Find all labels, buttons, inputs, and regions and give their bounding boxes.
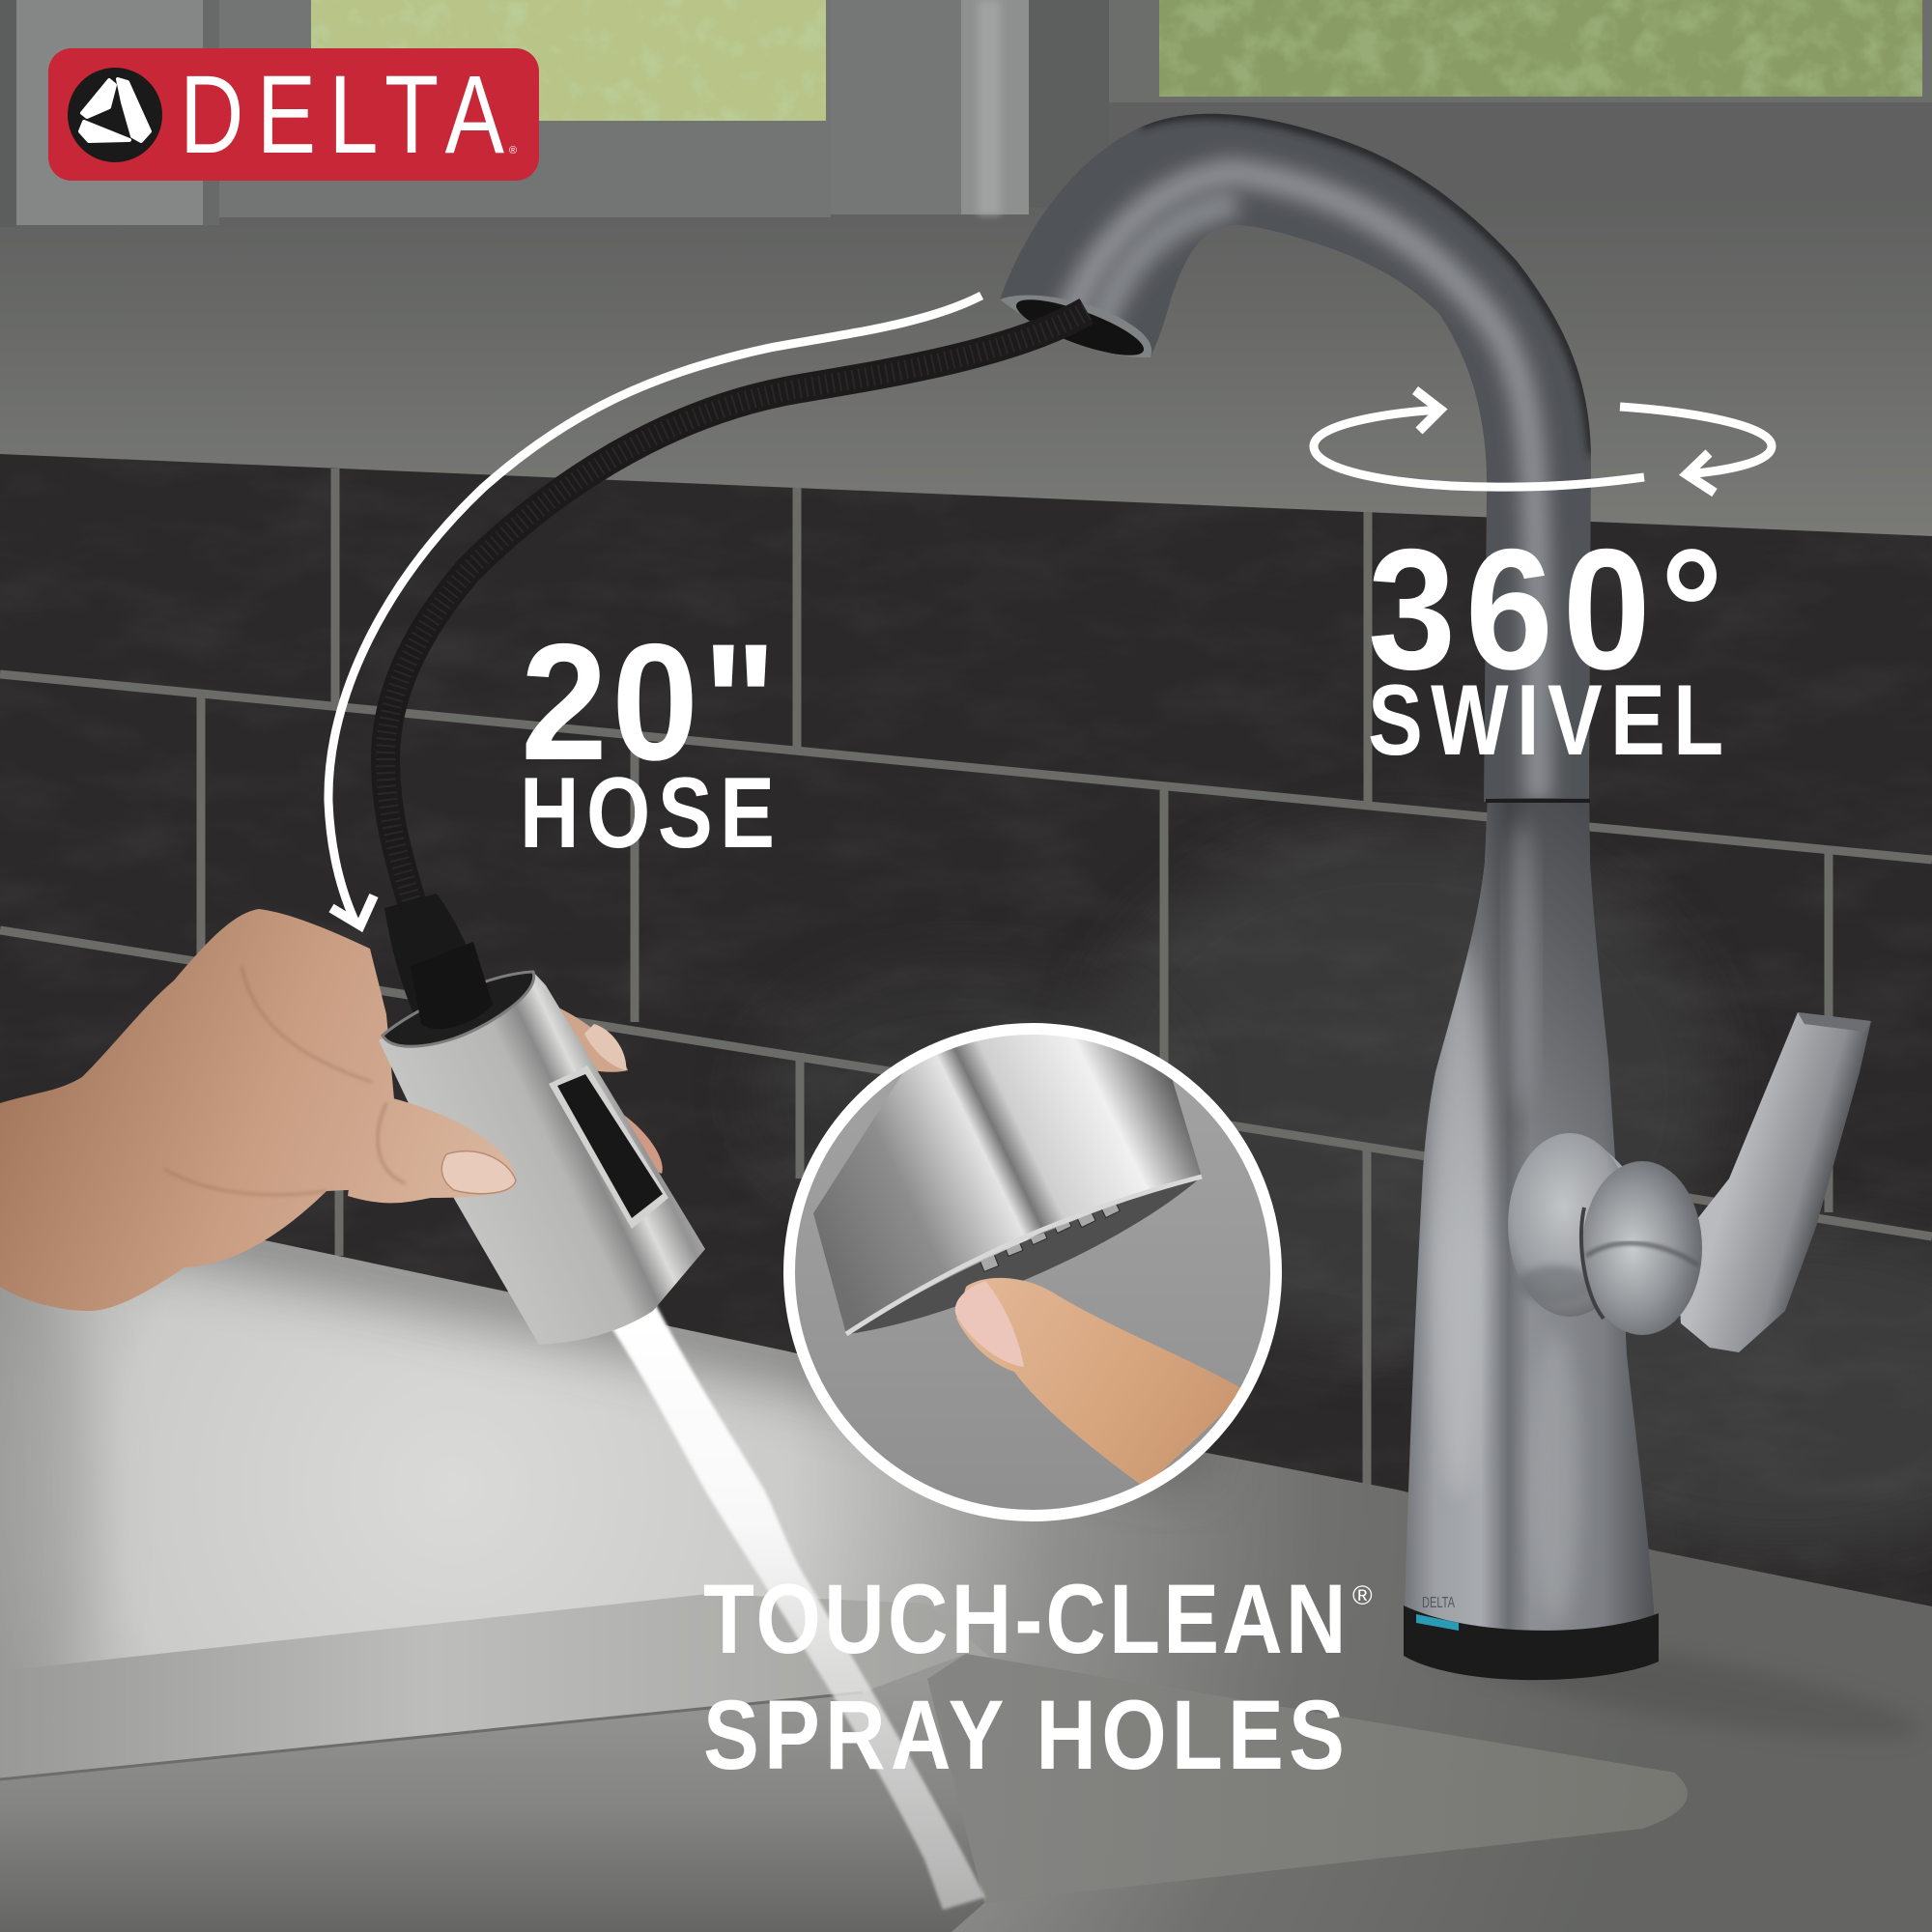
thumb knuckle crease (378, 1103, 406, 1183)
left swivel head (1415, 390, 1440, 431)
countertop (0, 1182, 1932, 1932)
inset background (788, 1028, 1277, 1517)
black base (1404, 1605, 1659, 1680)
faucet body (1401, 792, 1662, 1642)
hose connector (384, 894, 481, 1036)
spray button (549, 1065, 668, 1229)
base logo: DELTA (1422, 1595, 1455, 1611)
spray nozzles (980, 1204, 1121, 1272)
spout opening (1000, 289, 1151, 366)
wall band (0, 0, 1932, 580)
palm (0, 909, 396, 1311)
registered mark: ® (1352, 1580, 1373, 1610)
water stream (609, 1299, 985, 1910)
touch-clean line: TOUCH-CLEAN (703, 1564, 1347, 1675)
finger nail (955, 1281, 1024, 1367)
tile field (0, 454, 1932, 1642)
left swivel arc (1314, 410, 1644, 487)
back fingers (522, 995, 674, 1198)
20 inch figure: 20" (521, 610, 777, 795)
hose length arrow (328, 296, 981, 925)
arrowhead (331, 895, 374, 925)
sink far wall (927, 1654, 1688, 1903)
Delta logo badge (48, 48, 539, 181)
white triangle mark (80, 79, 150, 141)
status light (1416, 1614, 1459, 1631)
spray head metal (813, 1005, 1202, 1334)
360 figure: 360° (1368, 514, 1723, 706)
red badge (48, 48, 539, 181)
label: 20 inch hose (520, 610, 777, 869)
registered mark: ® (509, 145, 517, 156)
hand creases (164, 966, 372, 1195)
centre window frame (831, 0, 1109, 214)
right swivel head (1687, 453, 1715, 493)
faucet neck (985, 97, 1604, 811)
connector over opening (411, 942, 493, 1029)
hose (385, 311, 1087, 908)
spray head (379, 972, 705, 1345)
handle hub (1508, 1133, 1633, 1317)
shadow of faucet (1418, 1611, 1924, 1760)
lever top face (1798, 1012, 1871, 1032)
thumb nail (441, 1151, 516, 1194)
metal rim (846, 1177, 1202, 1334)
label: touch-clean spray holes (703, 1564, 1373, 1791)
right swivel arc (1620, 407, 1772, 474)
spray face (846, 1177, 1202, 1334)
hand holding spray head (0, 894, 705, 1345)
label: 360 degree swivel (1368, 514, 1723, 777)
grout lines (0, 469, 1932, 1488)
swivel word: SWIVEL (1368, 665, 1723, 777)
swivel arrows (1314, 390, 1772, 493)
thumb (348, 1092, 515, 1203)
left window panel (0, 0, 831, 227)
inset ring (789, 1029, 1276, 1516)
handle ball (1581, 1161, 1702, 1335)
spray head top opening (383, 972, 534, 1046)
inset: touch-clean spray holes close-up (788, 1005, 1277, 1517)
right window panel (1109, 0, 1932, 102)
faucet: spout, body and handle (985, 97, 1871, 1680)
spray holes line: SPRAY HOLES (703, 1680, 1345, 1791)
sink front edge (0, 1594, 995, 1779)
DELTA wordmark: DELTA (180, 53, 504, 177)
finger (956, 1278, 1246, 1488)
sink basin (0, 1654, 1688, 1932)
black circle mark (68, 68, 162, 162)
hose word: HOSE (520, 757, 775, 869)
lever handle (1676, 1012, 1871, 1352)
inset photo (813, 1005, 1246, 1488)
collar line (1486, 799, 1590, 803)
